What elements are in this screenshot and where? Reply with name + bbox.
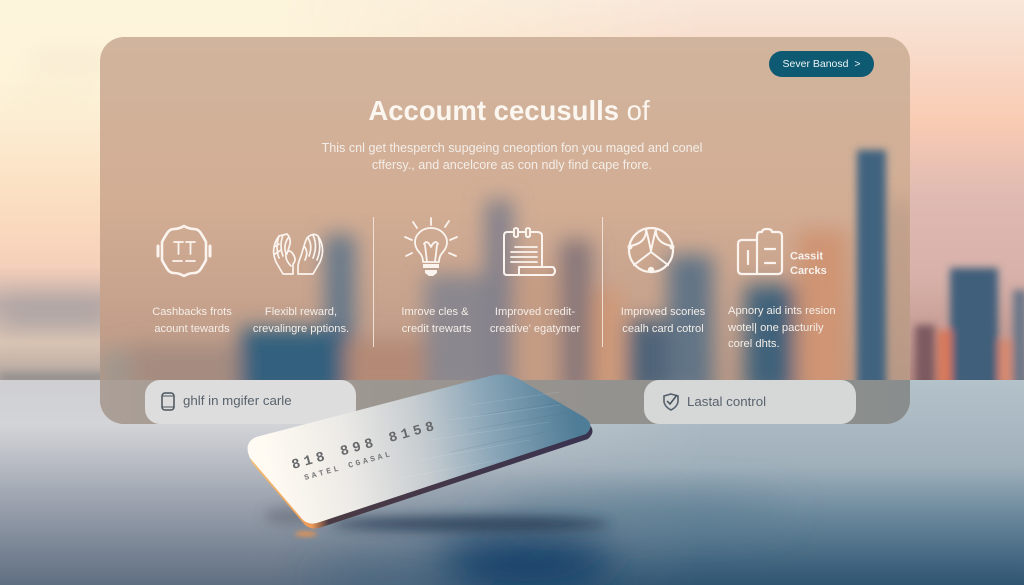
icon: globe wheel <box>628 226 674 274</box>
caption: apply: wotel| one pacturily <box>728 322 824 334</box>
caption: improved scores: cealh card cotrol <box>622 323 704 335</box>
pill label: ghlf in mgifer carle <box>183 393 292 408</box>
caption: improve <box>401 306 471 335</box>
pill button: Sever Banosd <box>769 51 874 77</box>
icon: cards with label <box>736 228 827 277</box>
card shadow <box>264 500 790 585</box>
pill: left with phone icon <box>145 380 356 424</box>
icon: light bulb <box>404 217 458 276</box>
divider 1 <box>373 217 374 347</box>
caption: apply <box>728 305 836 350</box>
caption: apply: corel dhts. <box>728 338 780 350</box>
icon: cards with label: Carcks <box>790 265 827 277</box>
title: Accoumt cecusulls of <box>368 95 650 126</box>
panel: translucent main panel <box>100 37 916 424</box>
caption: flexible reward: Flexibl reward, <box>265 306 337 318</box>
caption: improve: Imrove cles & <box>401 306 469 318</box>
caption: improved credit: creative' egatymer <box>490 323 580 335</box>
icon: cards with label: Cassit <box>790 250 823 262</box>
caption: cashbacks: acount tewards <box>154 323 230 335</box>
icon: phone <box>161 392 175 411</box>
caption: improve: credit trewarts <box>402 323 471 335</box>
caption: flexible reward <box>253 306 349 335</box>
caption: cashbacks <box>152 306 232 335</box>
intro text: cffersy., and ancelcore as con ndly find cape frore. <box>372 158 652 172</box>
embossed card name: SATEL CGASAL <box>303 450 394 483</box>
caption: improved credit: Improved credit- <box>495 306 575 318</box>
caption: apply: Apnory aid ints resion <box>728 305 836 317</box>
icon: badge face <box>156 224 212 278</box>
icon: open hands <box>272 233 324 275</box>
caption: improved scores <box>621 306 705 335</box>
caption: improved scores: Improved scories <box>621 306 705 318</box>
icon: notepad <box>503 227 556 276</box>
caption: flexible reward: crevalingre pptions. <box>253 323 349 335</box>
pill: right with shield icon <box>644 380 856 424</box>
intro text: This cnl get thesperch supgeing cneoption fon you maged and conel <box>322 141 702 155</box>
icon: shield check <box>663 393 679 411</box>
caption: cashbacks: Cashbacks frots <box>152 306 232 318</box>
pill button: Sever Banosd: Sever Banosd > <box>783 58 860 70</box>
intro text <box>322 141 702 172</box>
caption: improved credit <box>490 306 580 335</box>
pill label: Lastal control <box>687 394 766 409</box>
embossed card number: 818 898 8158 <box>290 418 440 474</box>
divider 2 <box>602 217 603 347</box>
